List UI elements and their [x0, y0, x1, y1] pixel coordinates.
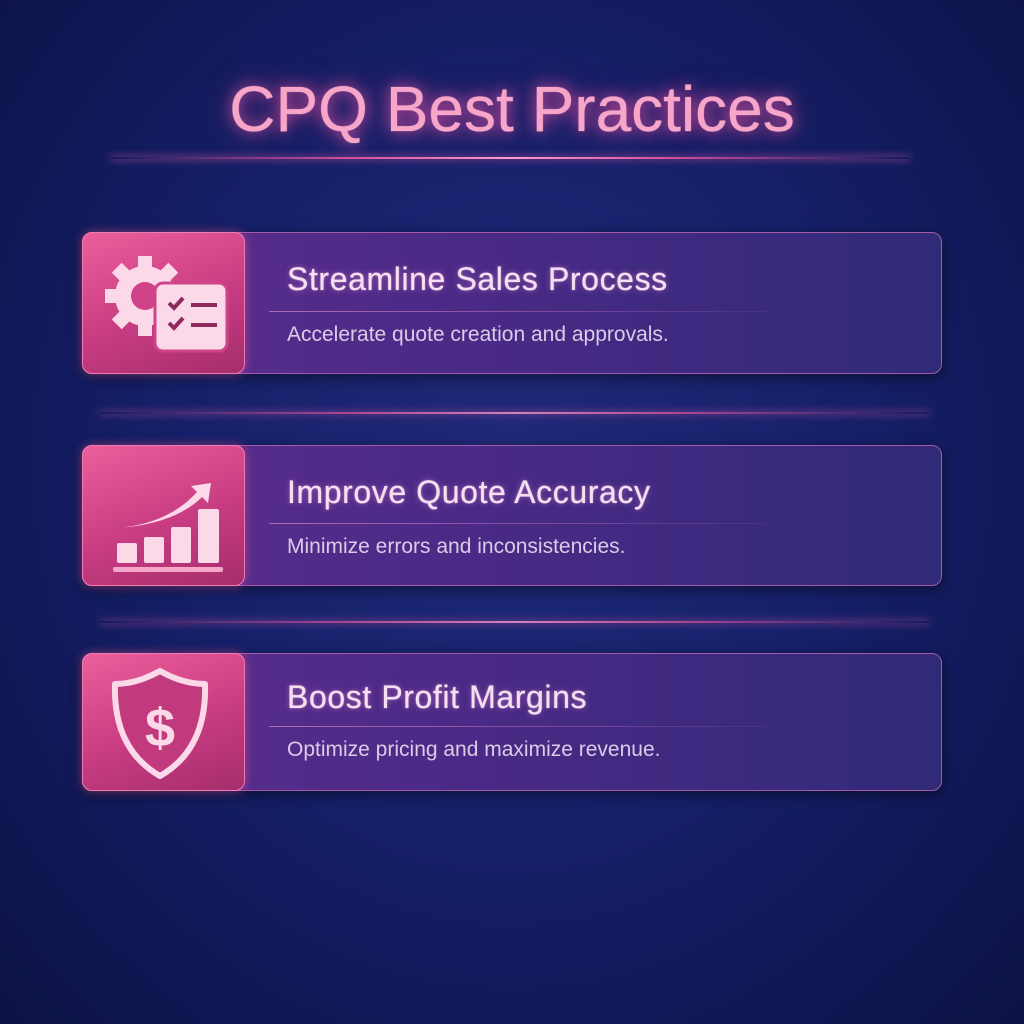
panel: streamline sales process — [82, 232, 942, 374]
heading: Boost Profit Margins — [287, 679, 587, 715]
icon: growth chart — [82, 445, 245, 586]
icon: shield dollar: $ — [145, 698, 175, 758]
text: Minimize errors and inconsistencies. — [287, 535, 625, 558]
text: Accelerate quote creation and approvals. — [287, 323, 669, 346]
heading: Streamline Sales Process — [287, 261, 668, 297]
heading: Improve Quote Accuracy — [287, 474, 651, 510]
panel: improve quote accuracy — [82, 445, 942, 586]
title: CPQ Best Practices — [229, 73, 795, 145]
text: Optimize pricing and maximize revenue. — [287, 738, 660, 761]
panel: boost profit margins — [82, 653, 942, 791]
icon: gear and checklist — [82, 232, 245, 374]
icon: shield dollar — [82, 653, 245, 791]
